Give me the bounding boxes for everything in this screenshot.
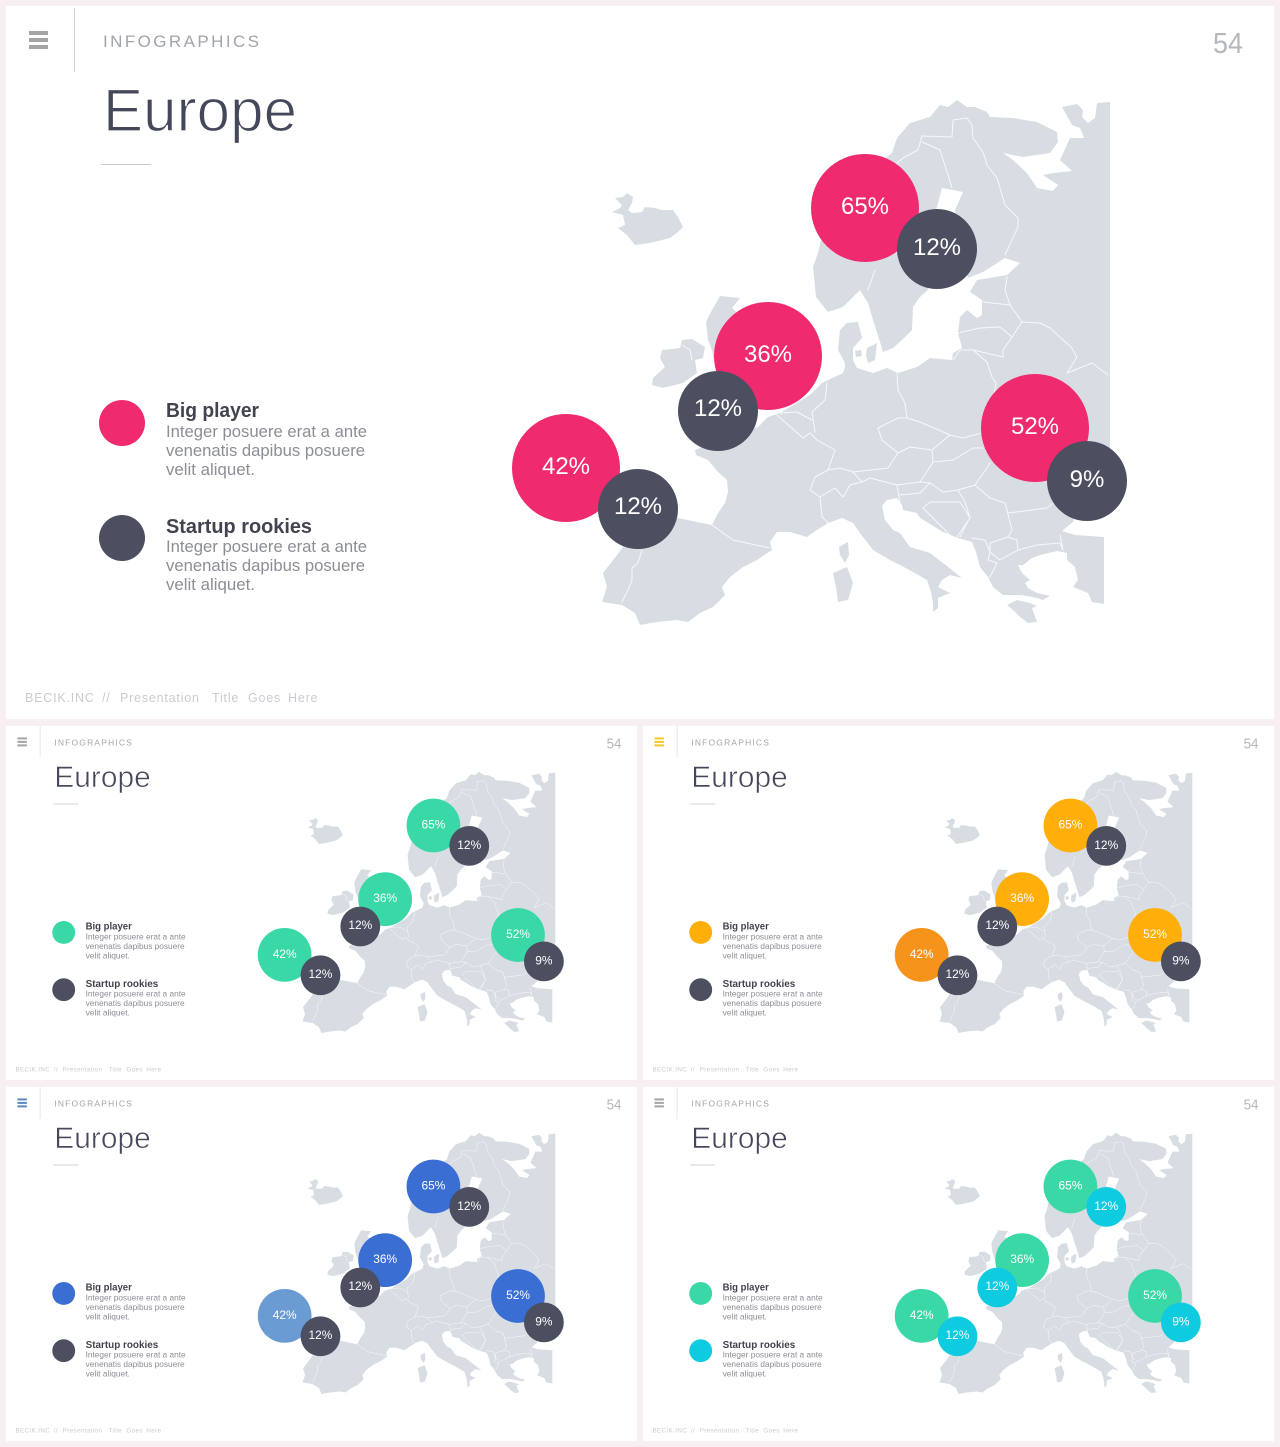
panel: green and cyan variant: 65% [1058,1178,1083,1192]
panel: orange variant: Title [745,1066,759,1073]
bubble: 9%: 9% [1070,466,1104,493]
legend: Startup rookies: venenatis dapibus posuere [166,556,365,575]
panel: green and cyan variant: BECIK.INC [652,1427,687,1434]
footer text: // [102,691,111,705]
panel: green and cyan variant: venenatis dapibus posuere [723,1359,822,1369]
legend: Startup rookies [99,515,367,594]
bubble: 65%: 65% [841,193,889,220]
panel: green and cyan variant: Integer posuere erat a ante [723,1292,823,1302]
bubble: 12% south: 12% [614,493,662,520]
panel: green and cyan variant: INFOGRAPHICS [691,1098,769,1108]
panel: green variant [6,726,637,1080]
panel: blue variant: Startup rookies [86,1340,159,1351]
legend: Startup rookies: velit aliquet. [166,575,255,594]
panel: orange variant: Integer posuere erat a ante [723,931,823,941]
bubble: 52%: 52% [1011,413,1059,440]
panel: blue variant: Title [108,1427,122,1434]
panel: orange variant: Presentation [700,1066,740,1073]
panel: blue variant: Presentation [63,1427,103,1434]
panel: green variant: venenatis dapibus posuere [86,998,185,1008]
panel: green variant: 54 [607,736,622,752]
bubble: 9% [1047,441,1127,521]
panel: orange variant: 54 [1244,736,1259,752]
bubble: 12% south [598,469,678,549]
footer text: Goes [248,691,281,705]
footer text: Presentation [120,691,200,705]
panel: blue variant: Europe [54,1122,151,1155]
panel: green and cyan variant: venenatis dapibus posuere [723,1302,822,1312]
bubble: 42% [512,414,620,522]
panel: orange variant [643,726,1274,1080]
panel: orange variant: velit aliquet. [723,950,767,960]
bubble: 52% [981,374,1089,482]
panel: green variant: Integer posuere erat a ante [86,989,186,999]
panel: green and cyan variant: Europe [691,1122,788,1155]
legend: Big player: Big player [166,400,259,422]
legend: Startup rookies: Startup rookies [166,516,312,538]
panel: orange variant: BECIK.INC [652,1066,687,1073]
panel: green variant: velit aliquet. [86,950,130,960]
panel: orange variant: 42% [910,947,934,961]
panel: orange variant: 65% [1058,817,1083,831]
panel: orange variant: Startup rookies [723,979,796,990]
bubble: 36% [714,302,822,410]
panel: green variant: Startup rookies [86,979,159,990]
panel: green variant: venenatis dapibus posuere [86,941,185,951]
bubble: 42%: 42% [542,453,590,480]
bubble: 65% [811,154,919,262]
bubble: 12% north [897,209,977,289]
panel: orange variant: 36% [1010,891,1034,905]
panel: blue variant: Here [146,1427,162,1434]
panel: orange variant: Goes [763,1066,780,1073]
menu icon [29,31,48,49]
bubble: 12% north: 12% [913,234,961,261]
panel: orange variant: 12% [1094,838,1119,852]
map of Europe [602,100,1110,625]
panel: green and cyan variant: 36% [1010,1252,1034,1266]
panel: green variant: 36% [373,891,397,905]
panel: green and cyan variant: 9% [1172,1314,1190,1328]
panel: orange variant: Europe [691,761,788,794]
panel: green variant: Here [146,1066,162,1073]
panel: blue variant: velit aliquet. [86,1311,130,1321]
panel: green variant: Big player [86,921,132,932]
panel: green and cyan variant: Here [783,1427,799,1434]
panel: green and cyan variant: Goes [763,1427,780,1434]
panel: main Europe slide [6,6,1274,719]
panel: blue variant: 54 [607,1097,622,1113]
panel: green and cyan variant: 42% [910,1308,934,1322]
panel: green and cyan variant: Startup rookies [723,1340,796,1351]
panel: green variant: 12% [348,918,373,932]
panel: green variant: Title [108,1066,122,1073]
legend: Big player: venenatis dapibus posuere [166,441,365,460]
panel: green and cyan variant: // [691,1427,695,1434]
panel: blue variant: venenatis dapibus posuere [86,1359,185,1369]
panel: orange variant: Integer posuere erat a ante [723,989,823,999]
panel: green variant: BECIK.INC [15,1066,50,1073]
panel: green and cyan variant: 54 [1244,1097,1259,1113]
bubble: 36%: 36% [744,341,792,368]
panel: green and cyan variant: 52% [1143,1288,1167,1302]
page number: 54 [1213,28,1243,60]
bubble: 12% west: 12% [694,395,742,422]
panel: blue variant: BECIK.INC [15,1427,50,1434]
legend: Big player: velit aliquet. [166,460,255,479]
panel: green variant: Presentation [63,1066,103,1073]
panel: orange variant: // [691,1066,695,1073]
panel: green and cyan variant: 12% [946,1328,970,1342]
panel: blue variant: 42% [273,1308,297,1322]
panel: blue variant: // [54,1427,58,1434]
panel: green and cyan variant: velit aliquet. [723,1311,767,1321]
footer text: Title [212,691,239,705]
panel: orange variant: venenatis dapibus posuere [723,941,822,951]
panel: blue variant: 9% [535,1314,553,1328]
panel: green and cyan variant: Presentation [700,1427,740,1434]
panel: orange variant: 52% [1143,927,1167,941]
panel: blue variant: 12% [309,1328,333,1342]
panel: orange variant: Here [783,1066,799,1073]
eyebrow label: INFOGRAPHICS [103,32,259,51]
panel: orange variant: INFOGRAPHICS [691,737,769,747]
panel: blue variant: Goes [126,1427,143,1434]
panel: blue variant: 52% [506,1288,530,1302]
panel: green and cyan variant: velit aliquet. [723,1369,767,1379]
title: Europe [103,77,297,144]
legend: Big player: Integer posuere erat a ante [166,422,367,441]
panel: blue variant: INFOGRAPHICS [54,1098,132,1108]
panel: green variant: 12% [457,838,482,852]
panel: green variant: 42% [273,947,297,961]
panel: blue variant: 36% [373,1252,397,1266]
panel: green and cyan variant: 12% [985,1279,1010,1293]
panel: blue variant: Big player [86,1282,132,1293]
bubble: 12% west [678,371,758,451]
panel: green and cyan variant [643,1087,1274,1441]
panel: green and cyan variant: 12% [1094,1199,1119,1213]
panel: green variant: 52% [506,927,530,941]
panel: green variant: Europe [54,761,151,794]
legend: Startup rookies: Integer posuere erat a ante [166,537,367,556]
panel: green variant: INFOGRAPHICS [54,737,132,747]
panel: blue variant [6,1087,637,1441]
panel: green variant: // [54,1066,58,1073]
panel: orange variant: 12% [985,918,1010,932]
footer text: BECIK.INC [25,691,95,705]
panel: blue variant: Integer posuere erat a ante [86,1292,186,1302]
panel: orange variant: Big player [723,921,769,932]
panel: orange variant: venenatis dapibus posuere [723,998,822,1008]
panel: orange variant: velit aliquet. [723,1008,767,1018]
panel: green and cyan variant: Integer posuere erat a ante [723,1350,823,1360]
panel: green variant: Goes [126,1066,143,1073]
panel: green and cyan variant: Big player [723,1282,769,1293]
legend: Big player [99,400,367,479]
panel: blue variant: 12% [348,1279,373,1293]
panel: green and cyan variant: Title [745,1427,759,1434]
panel: blue variant: 65% [421,1178,446,1192]
panel: blue variant: venenatis dapibus posuere [86,1302,185,1312]
panel: orange variant: 12% [946,967,970,981]
panel: green variant: velit aliquet. [86,1008,130,1018]
panel: green variant: Integer posuere erat a ante [86,931,186,941]
panel: green variant: 65% [421,817,446,831]
panel: blue variant: velit aliquet. [86,1369,130,1379]
panel: blue variant: 12% [457,1199,482,1213]
panel: orange variant: 9% [1172,953,1190,967]
panel: green variant: 12% [309,967,333,981]
footer text: Here [288,691,318,705]
panel: blue variant: Integer posuere erat a ante [86,1350,186,1360]
panel: green variant: 9% [535,953,553,967]
